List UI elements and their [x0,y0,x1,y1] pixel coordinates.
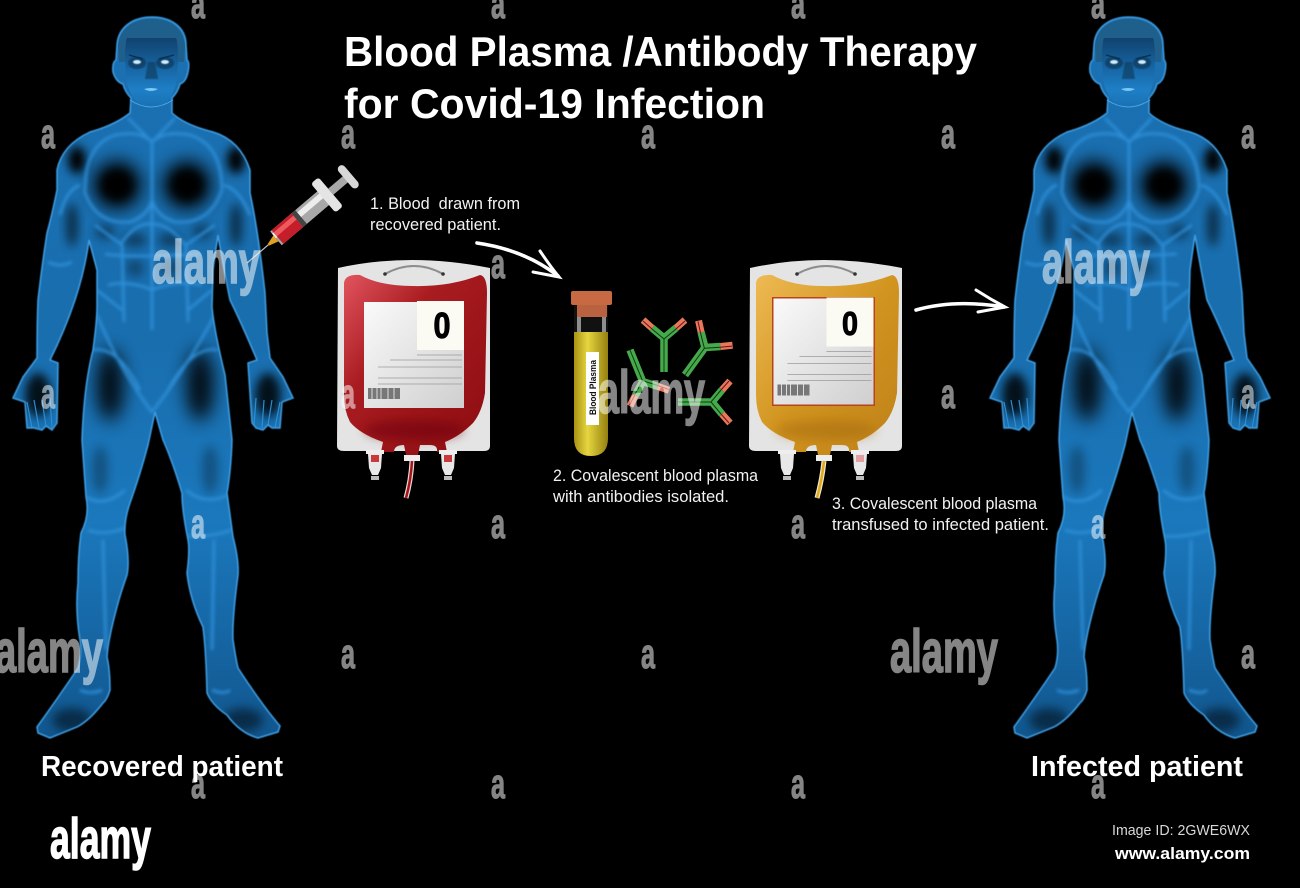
alamy logo: alamy [50,807,151,871]
watermarks: alamy [1042,229,1150,296]
step 2 label [552,467,759,506]
blood bag [337,260,490,498]
step 3 label [832,495,1049,534]
watermarks: a [1091,500,1105,547]
watermarks: a [791,760,805,807]
watermarks: a [641,630,655,677]
arrow: bag to infected patient [916,290,1005,312]
figure: infected patient body [990,17,1270,738]
blood type: 0 [842,305,858,342]
body outline glow [13,17,293,738]
plasma bag [749,260,902,498]
image id: Image ID: 2GWE6WX [1112,822,1250,839]
step 2 label: with antibodies isolated. [552,488,729,506]
body silhouette [13,17,293,738]
step 1 label [370,195,520,234]
watermarks: a [1241,370,1255,417]
tube cap [577,303,607,317]
watermarks: a [641,110,655,157]
watermarks: alamy [0,618,103,685]
watermarks: a [941,370,955,417]
title: Blood Plasma /Antibody Therapy [344,28,978,75]
head and face [118,19,185,108]
hand fingers [27,398,280,428]
watermarks: a [491,500,505,547]
title: for Covid-19 Infection [344,80,765,127]
watermarks: alamy [152,229,260,296]
flange [311,177,343,213]
needle [247,244,269,263]
watermarks: a [491,240,505,287]
title [344,28,978,127]
tube glass [574,305,608,456]
muscle shading [25,118,281,732]
plunger [328,176,349,195]
plasma liquid [574,332,608,456]
watermarks: a [41,110,55,157]
infected patient caption: Infected patient [1031,751,1243,783]
figure: recovered patient body [13,17,293,738]
step 2 label: 2. Covalescent blood plasma [553,467,759,485]
recovered patient caption: Recovered patient [41,751,283,783]
watermarks: a [191,760,205,807]
icon: syringe [235,160,364,277]
watermarks: a [341,110,355,157]
step 1 label: recovered patient. [370,216,501,234]
watermarks: a [41,370,55,417]
ports and tube [366,450,457,498]
step 3 label: transfused to infected patient. [832,516,1049,534]
test tube: blood plasma [571,291,612,456]
plunger cap [336,164,360,190]
watermarks: a [1091,760,1105,807]
tube label text: Blood Plasma [588,359,598,415]
website: www.alamy.com [1114,845,1250,863]
watermarks: alamy [890,618,998,685]
watermarks: a [491,760,505,807]
barrel [270,189,332,245]
watermarks: a [1241,630,1255,677]
step 3 label: 3. Covalescent blood plasma [832,495,1038,513]
step 1 label: 1. Blood drawn from [370,195,520,213]
blood in barrel [272,213,303,244]
watermarks: a [791,500,805,547]
watermarks: a [341,370,355,417]
blood type: 0 [434,305,450,346]
watermarks: a [1241,110,1255,157]
antibodies [611,320,733,423]
ports and tube [778,450,869,498]
watermarks: a [191,500,205,547]
tube label [586,352,599,425]
watermarks: a [941,110,955,157]
watermarks: alamy [598,359,705,426]
needle hub [266,235,279,248]
arrow: bag to tube [477,243,559,277]
watermarks: a [341,630,355,677]
